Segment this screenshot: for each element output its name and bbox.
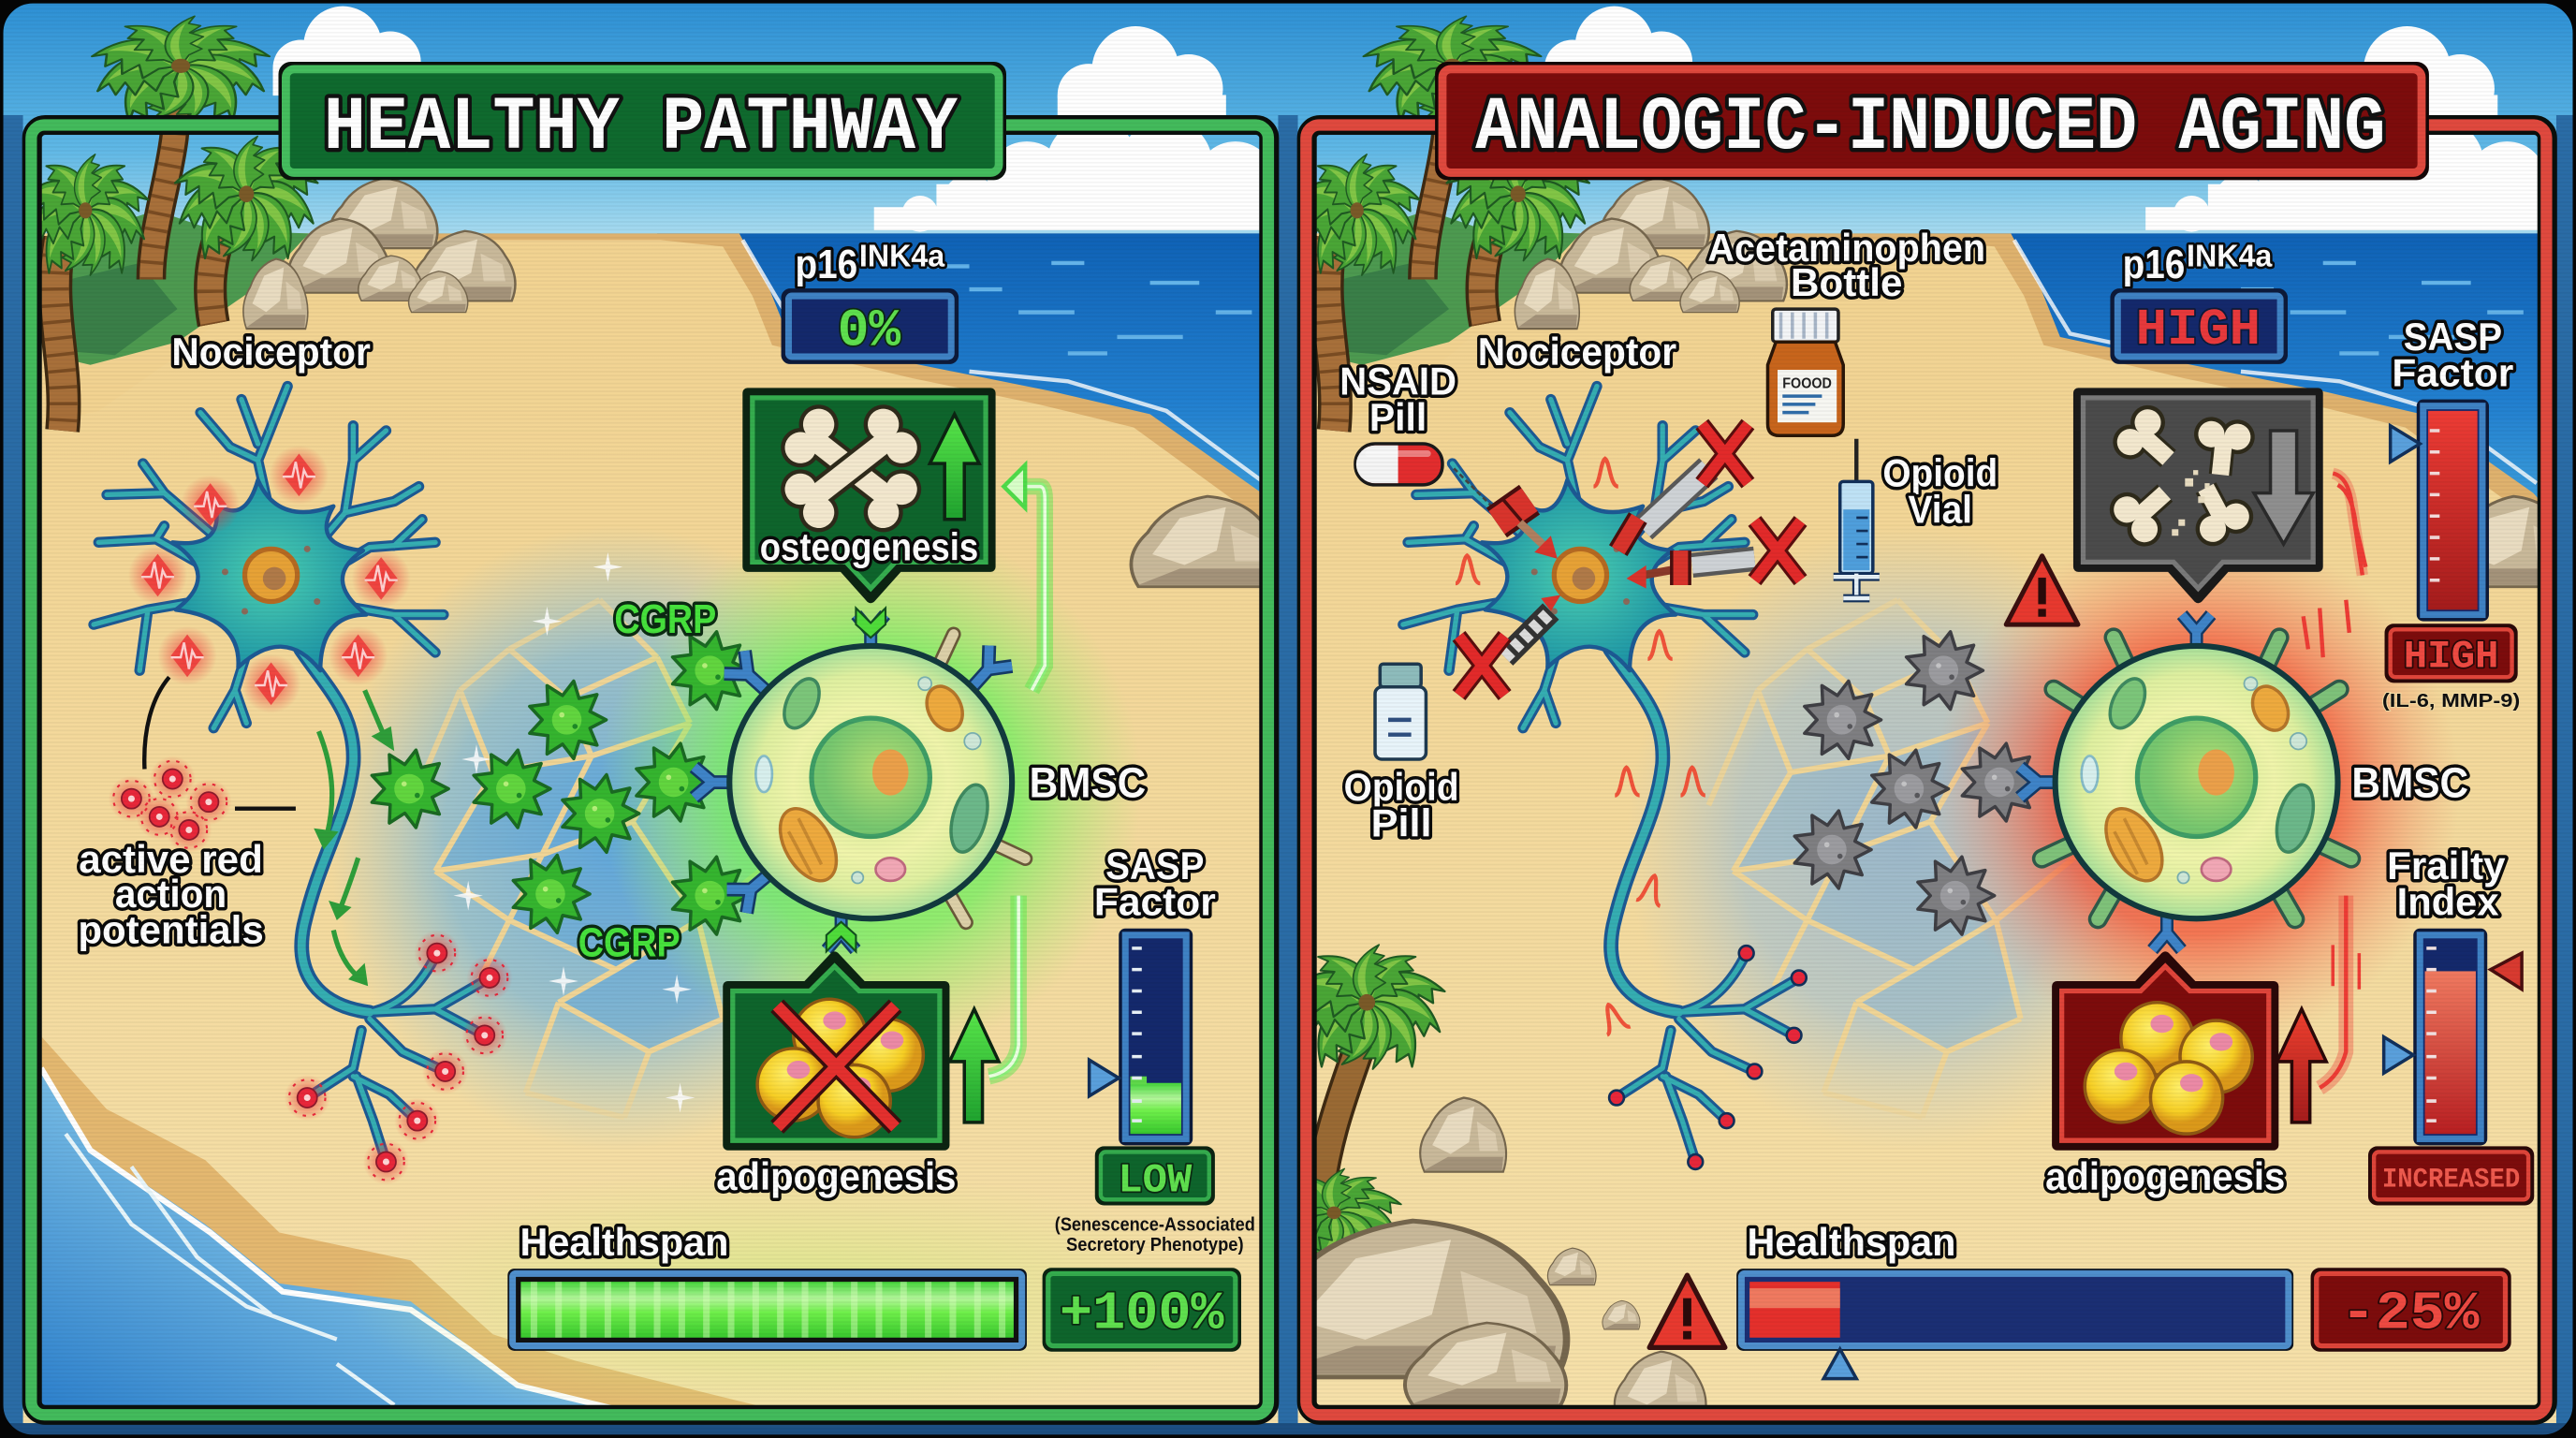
label: Opioid Vial: Opioid: [1882, 451, 1998, 495]
label: Nociceptor: Nociceptor: [171, 330, 371, 374]
red action potential pulses on neuron: [128, 446, 411, 713]
green feedback arrow to osteogenesis: [1003, 465, 1045, 690]
title: ANALOGIC-INDUCED AGING: ANALOGIC-INDUCED AGING: [1475, 86, 2385, 171]
broken bones box: [2078, 393, 2318, 598]
gauge marker: [2391, 426, 2420, 462]
SASP HIGH box: [2387, 626, 2515, 681]
label: Acetaminophen Bottle: Acetaminophen: [1707, 226, 1985, 270]
rock on right of beach: [1129, 494, 1260, 588]
BMSC cell with receptors: [695, 609, 1025, 951]
p16 value box HIGH: [2113, 291, 2285, 361]
SASP gauge low: [1090, 931, 1191, 1144]
icon: broken bones: [2102, 398, 2260, 553]
osteogenesis box: [748, 393, 990, 598]
label: osteogenesis: osteogenesis: [760, 525, 978, 569]
title: ANALOGIC-INDUCED AGING: [1438, 65, 2426, 178]
label: p16INK4a: [2123, 239, 2273, 287]
label: NSAID Pill: Pill: [1369, 395, 1427, 439]
scene: tropical beach, aging side: [1254, 0, 2576, 1438]
label: senescence note: (Senescence-Associated: [1055, 1215, 1255, 1236]
label: SASP Factor: Factor: [1094, 880, 1216, 924]
red feedback line from BMSC to bones: [2304, 474, 2365, 657]
label: Opioid Pill: Opioid: [1344, 765, 1459, 809]
label: adipogenesis: adipogenesis: [2045, 1154, 2285, 1198]
red action potential cluster: [109, 756, 231, 853]
grey tissue mosaic: [1650, 552, 2119, 1124]
label: Frailty Index: Index: [2397, 880, 2499, 924]
icon: green up arrow for adipogenesis: [949, 1009, 999, 1123]
label: active red action potentials: [78, 837, 264, 952]
SASP LOW box: [1097, 1149, 1212, 1205]
label: NSAID Pill: [1339, 359, 1456, 439]
label: adipogenesis: adipogenesis: [716, 1154, 956, 1198]
gauge marker: [1090, 1060, 1119, 1096]
icon: grey down arrow: [2254, 431, 2313, 544]
label: p16INK4a: p16: [2123, 242, 2185, 287]
rock behind SASP gauge: [2489, 494, 2538, 588]
icon: warning triangle by cell: [2006, 556, 2078, 624]
icon: acetaminophen bottle: [1767, 309, 1843, 435]
label: Opioid Pill: [1344, 765, 1459, 844]
sparkles: [453, 552, 695, 1112]
panel: healthy pathway: [78, 239, 1255, 1430]
label: IL-6, MMP-9: (IL-6, MMP-9): [2382, 691, 2520, 712]
label: Nociceptor: Nociceptor: [1478, 330, 1676, 374]
label: Opioid Vial: Vial: [1909, 487, 1972, 531]
label: Acetaminophen Bottle: [1707, 226, 1985, 304]
p16 value box 0%: [783, 291, 956, 361]
frame: aging panel: [1306, 125, 2547, 1415]
label: Frailty Index: Frailty: [2387, 844, 2506, 888]
label: CGRP top: CGRP: [614, 596, 716, 642]
healthspan marker: [1823, 1349, 1856, 1379]
frailty red marker: [2491, 953, 2522, 990]
scene: tropical beach, healthy side: [0, 0, 1364, 1438]
frailty blue marker: [2384, 1037, 2413, 1073]
label: SASP Factor: SASP: [1105, 844, 1204, 888]
p16 value box HIGH: HIGH: [2136, 302, 2261, 360]
label: Opioid Vial: [1882, 451, 1998, 531]
label: Acetaminophen Bottle: Bottle: [1791, 260, 1902, 304]
icon: crossed bones: [773, 397, 929, 540]
icon: red X over fat cells: [777, 1005, 896, 1127]
label: senescence note: Secretory Phenotype): [1066, 1235, 1244, 1255]
red feedback line lower: [2320, 896, 2359, 1088]
icon: NSAID blocked arrow: [1454, 468, 1558, 559]
label: SASP Factor: SASP: [2404, 315, 2502, 359]
p16 value box 0%: 0%: [838, 301, 900, 361]
INCREASED box: INCREASED: [2382, 1163, 2520, 1195]
icon: opioid vial syringe: [1834, 439, 1880, 598]
BMSC cell: [2020, 615, 2351, 950]
SASP HIGH box: HIGH: [2404, 635, 2499, 680]
+100% box: +100%: [1060, 1284, 1224, 1344]
faded red action spikes: [1456, 459, 1705, 1034]
nociceptor neuron: [94, 387, 513, 1185]
SASP gauge high: [2391, 401, 2487, 620]
label: Frailty Index: [2387, 844, 2506, 924]
label: BMSC: BMSC: [1030, 758, 1146, 806]
signal direction arrows along axon: [314, 690, 394, 986]
label: SASP Factor: Factor: [2392, 351, 2513, 395]
title: HEALTHY PATHWAY: HEALTHY PATHWAY: [324, 86, 959, 171]
healthspan lime glow: [345, 1167, 1232, 1430]
label: SASP Factor: [2392, 315, 2513, 395]
nociceptor neuron: [1403, 387, 1807, 1169]
lower-left palm: [1316, 944, 1446, 1253]
BMSC green glow: [600, 518, 1142, 1060]
label: Healthspan: Healthspan: [520, 1220, 728, 1264]
icon: fat cells: [2085, 1003, 2252, 1134]
label: BMSC: BMSC: [2351, 758, 2468, 806]
green feedback line from BMSC: [989, 896, 1018, 1077]
panel: analgesic-induced aging: [1339, 226, 2532, 1379]
green CGRP particles: [372, 632, 749, 934]
icon: red up arrow: [2277, 1009, 2326, 1123]
icon: syringe upper with red X: [1618, 424, 1748, 550]
lower-left rocks: [1316, 1096, 1707, 1405]
label: p16INK4a: p16: [795, 242, 857, 287]
label: CGRP bottom: CGRP: [578, 920, 681, 966]
INCREASED box: [2371, 1149, 2532, 1203]
icon: syringe right with red X: [1627, 521, 1801, 588]
healthspan bar full: [509, 1270, 1025, 1349]
SASP LOW box: LOW: [1118, 1158, 1193, 1205]
icon: NSAID pill: [1355, 444, 1442, 485]
shoreline water, bottom left: [41, 1037, 755, 1405]
BMSC red glow: [1934, 526, 2459, 1051]
healthspan bar low: [1738, 1270, 2291, 1379]
icon: fat cells: [757, 999, 923, 1137]
label: active red action potentials: potentials: [78, 908, 264, 952]
icon: opioid pill blocked syringe with X: [1459, 594, 1560, 696]
icon: warning triangle by healthspan: [1649, 1275, 1725, 1347]
-25% box: -25%: [2341, 1284, 2480, 1344]
+100% box: [1045, 1270, 1238, 1349]
label: NSAID Pill: NSAID: [1339, 359, 1456, 403]
Frailty gauge: [2384, 931, 2522, 1144]
label: active red action potentials: active red: [79, 837, 263, 881]
label: senescence note: [1055, 1215, 1255, 1255]
adipogenesis box: [2056, 957, 2274, 1145]
black leader lines: [144, 677, 296, 809]
adipogenesis box: [728, 957, 944, 1145]
grey inactive particles: [1794, 632, 2039, 934]
label: Healthspan: Healthspan: [1748, 1220, 1955, 1264]
label: p16INK4a: INK4a: [2187, 239, 2273, 273]
label: Opioid Pill: Pill: [1371, 800, 1432, 844]
icon: acetaminophen bottle: FOOOD: [1782, 375, 1832, 391]
label: SASP Factor: [1094, 844, 1216, 924]
label: p16INK4a: [795, 239, 945, 287]
tissue mosaic with blue glow: [343, 541, 842, 1137]
label: p16INK4a: INK4a: [859, 239, 945, 273]
frame: healthy panel: [31, 125, 1269, 1415]
icon: green up arrow: [929, 414, 979, 520]
-25% box: [2313, 1270, 2509, 1349]
icon: opioid pill vial: [1375, 664, 1426, 759]
label: active red action potentials: action: [115, 872, 227, 916]
